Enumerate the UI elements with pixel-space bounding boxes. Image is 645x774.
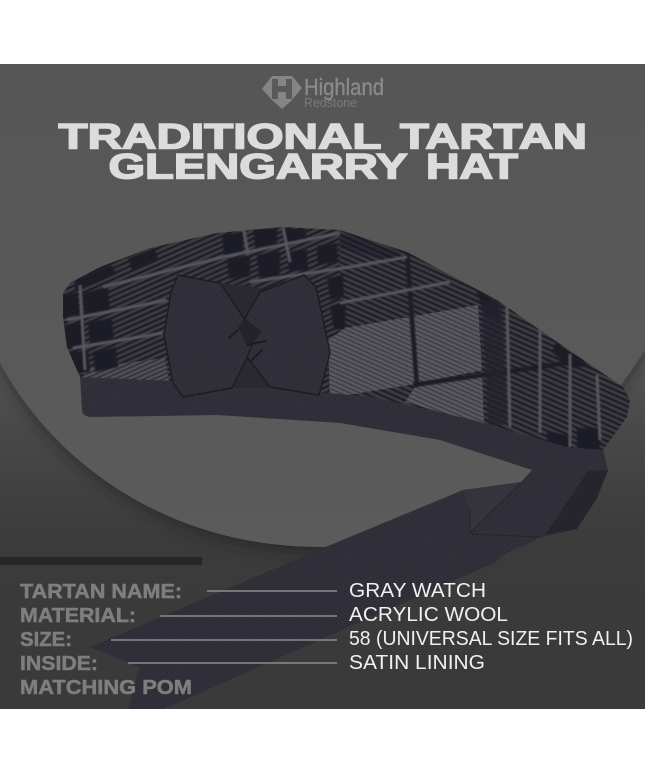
specification values: GRAY WATCH — [349, 579, 486, 602]
grey plaid stripes — [67, 225, 600, 447]
dark plaid stripes — [407, 253, 595, 425]
title: TRADITIONAL — [58, 118, 382, 156]
logo: Highland Redstone: Highland — [304, 74, 384, 100]
specification labels: MATCHING POM — [20, 677, 192, 699]
hat crown: tartan plaid — [55, 220, 640, 460]
specification labels: INSIDE: — [20, 653, 98, 675]
dark check blocks — [62, 228, 600, 452]
specification labels: TARTAN NAME: — [20, 581, 182, 603]
specification labels: SIZE: — [20, 629, 72, 651]
hat band — [80, 375, 608, 472]
title: GLENGARRY — [108, 148, 408, 186]
title: HAT — [426, 148, 518, 186]
divider bar — [0, 557, 202, 565]
title — [58, 118, 587, 186]
specification values: SATIN LINING — [349, 651, 485, 674]
connector lines — [111, 591, 337, 663]
tail ribbons of the hat — [90, 453, 608, 709]
logo: Highland Redstone — [262, 74, 384, 110]
logo: Highland Redstone: Redstone — [304, 95, 357, 110]
specification labels — [20, 581, 192, 699]
title: TARTAN — [400, 118, 587, 156]
specification values — [349, 579, 633, 674]
light grey check areas — [82, 305, 484, 424]
specification values: 58 (UNIVERSAL SIZE FITS ALL) — [349, 627, 633, 650]
specification values: ACRYLIC WOOL — [349, 603, 508, 626]
specification labels: MATERIAL: — [20, 605, 136, 627]
hat bow — [164, 275, 330, 397]
